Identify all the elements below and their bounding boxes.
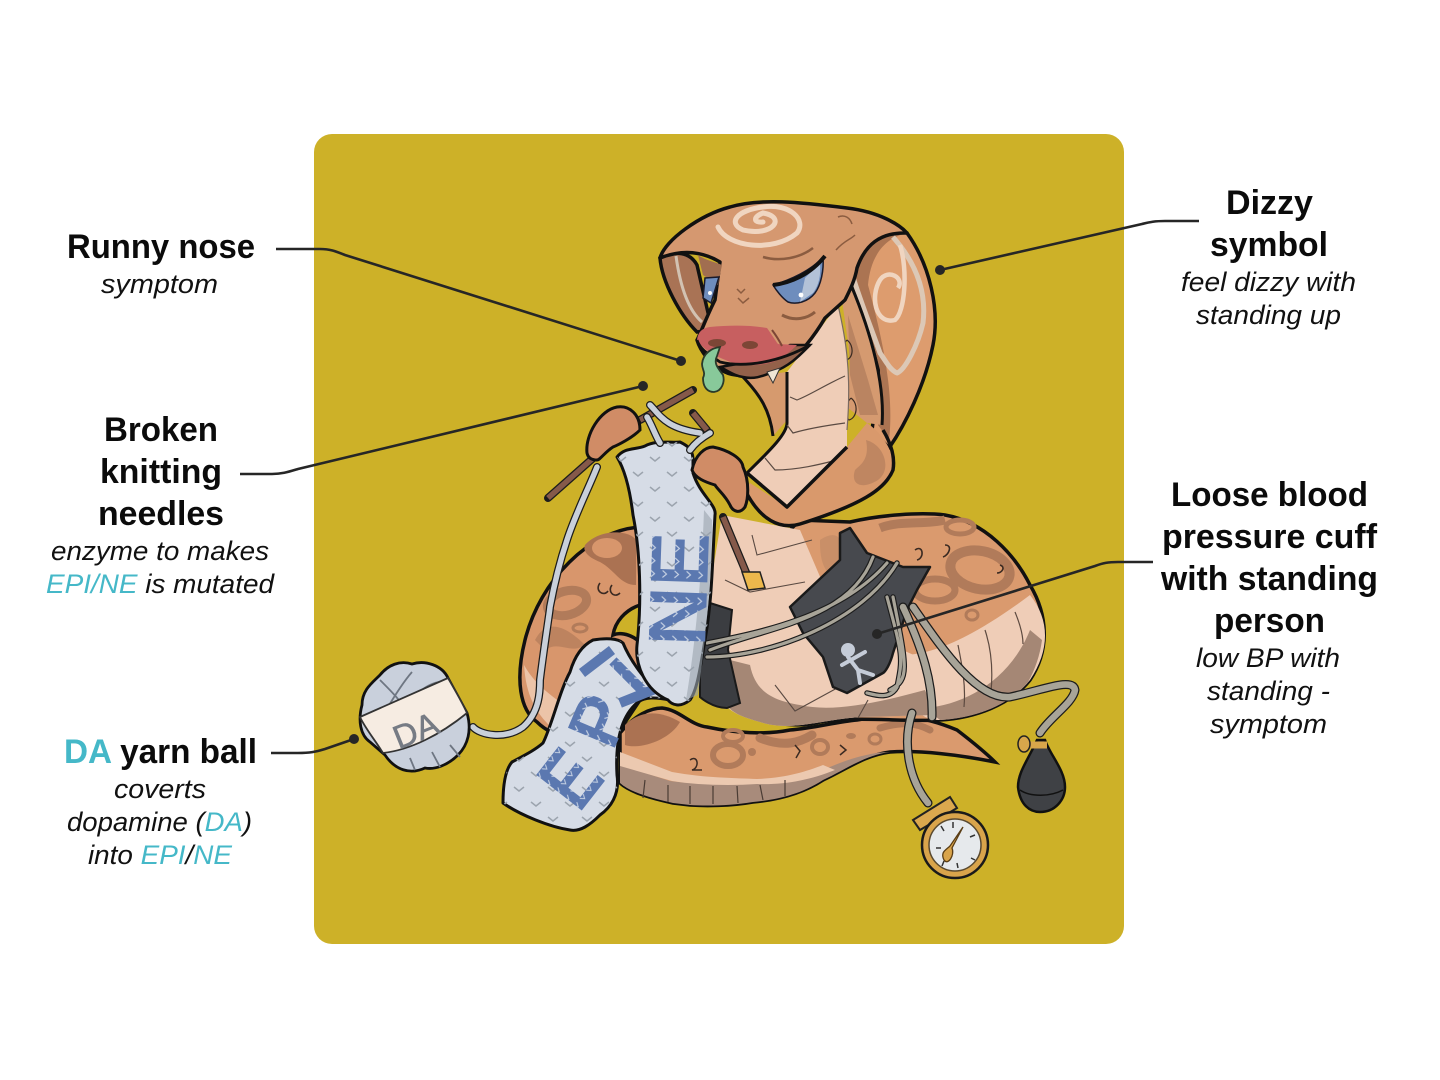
text: loose blood pressure cuff: with standing (1160, 560, 1378, 598)
icon: pressure gauge (913, 797, 988, 878)
text: DA yarn ball: DA yarn ball (64, 733, 257, 771)
left neck (743, 372, 787, 436)
letter text on scarf: NE (632, 531, 727, 648)
text: DA yarn ball (64, 733, 257, 870)
text: runny nose: Runny nose (67, 228, 255, 266)
yarn thread (473, 405, 710, 735)
text: loose blood pressure cuff: symptom (1210, 709, 1327, 739)
tubes (707, 557, 1075, 803)
text: loose blood pressure cuff (1160, 476, 1378, 739)
right eye (773, 256, 825, 319)
text: broken knitting needles: Broken (104, 411, 218, 449)
text: loose blood pressure cuff: person (1214, 602, 1325, 640)
illustration: cobra knitting (360, 202, 1075, 878)
letter text on scarf: P (553, 683, 646, 758)
text: loose blood pressure cuff: low BP with (1196, 643, 1340, 673)
neck and hood (660, 232, 935, 526)
head (660, 202, 907, 392)
leader line: runny nose (276, 249, 686, 366)
letter serifs (582, 650, 660, 703)
text: dizzy symbol: feel dizzy with (1181, 267, 1356, 297)
text: DA yarn ball: coverts (114, 774, 206, 804)
text: dizzy symbol: standing up (1196, 300, 1341, 330)
right body coil (720, 514, 1045, 725)
text: broken knitting needles: EPI/NE is mutated (46, 569, 275, 599)
lower jaw (720, 345, 810, 378)
leader line: cuff (872, 562, 1153, 639)
text: dizzy symbol: Dizzy (1226, 184, 1313, 222)
head spiral (718, 206, 800, 245)
text: dizzy symbol: symbol (1210, 226, 1328, 264)
back left coil (520, 527, 640, 745)
text: DA yarn ball: dopamine (DA) (67, 807, 252, 837)
letter text on scarf: I (596, 644, 664, 712)
yarn label: DA (388, 705, 444, 756)
icon: pump bulb (1018, 736, 1065, 812)
neck side strip (842, 285, 882, 425)
icon: standing person (841, 643, 873, 683)
text: runny nose: symptom (101, 269, 218, 299)
letter text on scarf (520, 644, 664, 826)
panel: illustration background (314, 134, 1124, 944)
neck loop (745, 423, 893, 526)
broken needles (548, 390, 765, 590)
left hood (660, 253, 712, 332)
leader line: yarn ball (271, 734, 359, 753)
scarf: lower EPI (503, 639, 670, 830)
text: loose blood pressure cuff: Loose blood (1171, 476, 1368, 514)
letter text on scarf: E (520, 732, 621, 826)
text: loose blood pressure cuff: pressure cuff (1162, 518, 1378, 556)
hands (587, 407, 748, 511)
DA yarn ball (360, 663, 469, 771)
text: broken knitting needles (46, 411, 275, 599)
front belly (708, 515, 935, 726)
text: loose blood pressure cuff: standing - (1207, 676, 1330, 706)
fang (767, 368, 780, 383)
nose (697, 326, 810, 365)
leader line: dizzy (935, 221, 1199, 275)
text: DA yarn ball: into EPI/NE (88, 840, 233, 870)
text: dizzy symbol (1181, 184, 1356, 330)
runny nose drip (702, 347, 724, 392)
chest scales (747, 305, 849, 505)
text: broken knitting needles: needles (98, 495, 224, 533)
text: broken knitting needles: knitting (100, 453, 222, 491)
left eye (703, 277, 719, 303)
tail (620, 708, 995, 806)
text: runny nose (67, 228, 255, 299)
leader line: needles (240, 381, 648, 474)
blood pressure cuff (700, 528, 930, 708)
scarf: upper NE (617, 442, 727, 705)
right hood (852, 232, 935, 448)
text: broken knitting needles: enzyme to makes (51, 536, 269, 566)
